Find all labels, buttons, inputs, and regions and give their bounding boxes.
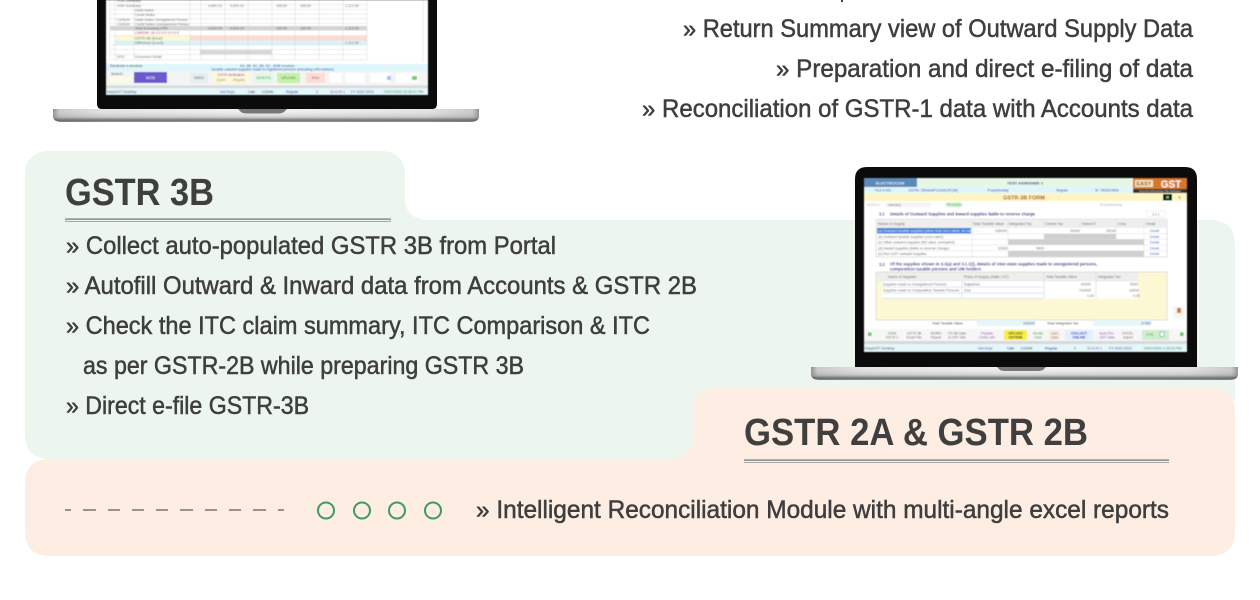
laptop screen: Excel File (907, 336, 921, 340)
table: outward supplies (876, 219, 1167, 257)
laptop screen: FY 2022-2023 (1109, 346, 1132, 350)
table: inter-state supplies (876, 272, 1167, 320)
table: inter-state supplies: 0.00 (1133, 294, 1140, 298)
laptop screen: GREG (194, 76, 204, 80)
laptop screen: Report (931, 336, 941, 340)
table: inter-state supplies: Name of Supplies (888, 275, 917, 279)
table: inter-state supplies: 50000 (1081, 283, 1091, 287)
laptop screen: Credit Notes (135, 13, 155, 17)
laptop screen: Credit Notes Unregistered Person (135, 22, 189, 26)
laptop screen: Hot Keys (220, 90, 235, 94)
table: inter-state supplies: 18000 (1129, 288, 1139, 292)
laptop screen: 4,800.00 (230, 4, 244, 8)
laptop screen: VIEW (888, 332, 897, 336)
feature line: » Autofill Outward & Inward data from Accounts & GSTR 2B (66, 272, 697, 300)
laptop screen: GSTR 3B (907, 332, 922, 336)
laptop screen: Debit Notes (135, 8, 154, 12)
laptop screen: HSN Summary (117, 4, 141, 8)
laptop: GSTR-1 summary screenshot (53, 0, 479, 122)
laptop screen: composition taxable persons and UIN holders (890, 266, 982, 272)
text block: reconciliation feature: » Intelligent Reconciliation Module with multi-angle excel reports (476, 496, 1169, 524)
laptop screen (864, 178, 1187, 352)
laptop screen: DATA Pre (256, 76, 271, 80)
laptop screen: Total Integrated Tax (1047, 322, 1079, 326)
table: inter-state supplies: 9000 (1130, 283, 1138, 287)
feature line: » Reconciliation of GSTR-1 data with Accounts data (642, 95, 1193, 123)
panel: GSTR 3B green background (25, 151, 1235, 459)
laptop screen: GSTIN: 29AAAAP1234A1Z5 [W] (908, 188, 958, 192)
laptop screen: COLLECT (1071, 332, 1088, 336)
laptop screen: LOGIN (1021, 346, 1033, 350)
laptop screen: Document Detail (135, 55, 162, 59)
table: outward supplies: Cess (1118, 222, 1126, 226)
laptop screen: Rectify (1033, 332, 1043, 336)
laptop screen: Regular (233, 78, 246, 82)
laptop screen: B2CB (146, 76, 156, 80)
laptop screen: Proprietorship (1100, 203, 1122, 207)
table: outward supplies: (c) Other outward supplies (Nil rated, exempted) (878, 240, 955, 244)
laptop screen: GSTR Verification (218, 73, 245, 77)
table: outward supplies: 20000 (998, 246, 1008, 250)
laptop screen: MONTH (867, 203, 881, 207)
laptop screen: 156.60 (276, 26, 287, 30)
laptop screen: 4,800.00 (230, 26, 244, 30)
table: outward supplies: Nature of Supply (878, 222, 905, 226)
laptop screen: 3.2 (879, 262, 885, 267)
logo: Easy GST: EASY (1137, 182, 1152, 188)
table: inter-state supplies: 100000 (1079, 288, 1091, 292)
laptop screen: to GST Site (948, 336, 966, 340)
laptop screen: 1 (316, 90, 318, 94)
feature line: as per GSTR-2B while preparing GSTR 3B (83, 352, 524, 380)
table: outward supplies: 3600 (1036, 246, 1044, 250)
laptop screen: Import (1123, 336, 1133, 340)
laptop screen: TEST ASSESSEE 1 (1007, 180, 1044, 186)
laptop screen: A4, 4B, 4C, 6B, 6C - B2B Invoices (240, 64, 295, 68)
laptop screen: 02/07/2022 12:26:47 PM (384, 90, 423, 94)
table: inter-state supplies: 0.00 (1087, 294, 1094, 298)
laptop screen: GSTR-1 (886, 336, 898, 340)
laptop screen: GSTR-3B FORM (1003, 196, 1045, 202)
laptop screen: Regular (286, 90, 299, 94)
panel: GSTR 2A & 2B peach background (25, 388, 1235, 556)
table: outward supplies: 436000 (995, 229, 1007, 233)
laptop screen: Quick (217, 78, 226, 82)
laptop screen: GSTR3B (1009, 336, 1023, 340)
table: outward supplies: Detail (1150, 246, 1159, 250)
logo: Easy GST (1133, 178, 1187, 193)
laptop screen: January (888, 203, 901, 207)
table: outward supplies: Detail (1150, 229, 1159, 233)
laptop screen: 4,800.00 (208, 4, 222, 8)
laptop base (811, 367, 1238, 380)
feature line: » Preparation and direct e-filing of data (776, 55, 1193, 83)
cropped text line at top (841, 0, 843, 2)
table: outward supplies: (d) Inward supplies (liable to reverse charge) (878, 246, 949, 250)
laptop screen: LOGIN (262, 90, 274, 94)
table: inter-state supplies: Supplies made to Composition Taxable Persons (883, 288, 959, 292)
feature line: » Check the ITC claim summary, ITC Comparison & ITC (66, 312, 650, 340)
laptop screen: 1,112.50 (345, 26, 359, 30)
laptop screen: CHALLAN (979, 336, 995, 340)
laptop screen: 156.60 (300, 26, 311, 30)
laptop: GSTR-3B form screenshot (811, 167, 1238, 380)
laptop screen: CARDIN: 30 0.0 0.0 0.0 0.0 (135, 31, 179, 35)
laptop screen: Difference (A-a-b) (135, 41, 164, 45)
laptop screen: 30.8.05.1 (330, 90, 345, 94)
laptop screen: Debit Notes Unregistered Person (135, 18, 188, 22)
table: inter-state supplies: Total Taxable Value (1046, 275, 1077, 279)
laptop screen: CDNUR (117, 18, 130, 22)
laptop screen: 3.1.1 (1152, 212, 1160, 216)
heading: GSTR 3B: GSTR 3B (65, 172, 214, 214)
laptop screen: 27360 (1141, 322, 1151, 326)
laptop body (855, 167, 1197, 367)
laptop screen: Total Excluding HSN (135, 26, 168, 30)
laptop screen: ONLINE (1073, 336, 1086, 340)
laptop screen: Hot Keys (978, 346, 993, 350)
laptop screen: 3.1 (879, 212, 885, 216)
laptop screen: Error (312, 76, 320, 80)
logo: Easy GST: Council of American Tax Software (1139, 189, 1181, 193)
table: inter-state supplies: Supplies made to Unregistered Persons (883, 283, 947, 287)
laptop screen: Electrode e-invoices (110, 64, 143, 68)
laptop screen: EXCEL (1122, 332, 1134, 336)
laptop screen: Prepare (981, 332, 993, 336)
laptop screen: 02/07/2022 1:25:24 PM (1144, 346, 1181, 350)
laptop screen: Regular (1056, 188, 1069, 192)
table: outward supplies: (a) Outward taxable supplies (other than zero rated, nil rated and (878, 229, 981, 233)
laptop screen: User (1051, 332, 1059, 336)
laptop screen: FS-3B Data (948, 332, 966, 336)
laptop screen: 1,112.50 (345, 4, 359, 8)
laptop screen: Taxable outward supplies made to registered persons (including UIN-holders) (211, 68, 334, 72)
laptop screen: Total Taxable Value (932, 322, 963, 326)
feature line: » Direct e-file GSTR-3B (66, 392, 309, 420)
laptop screen: GSTR-3B (Excel) (135, 36, 163, 40)
timeline connector: dashes (65, 509, 284, 511)
laptop screen (106, 0, 428, 95)
heading: GSTR 2A & GSTR 2B: GSTR 2A & GSTR 2B (744, 412, 1088, 454)
laptop screen: EasyGST Desktop (107, 90, 136, 94)
table: outward supplies: Detail (1150, 252, 1159, 256)
laptop screen: Calc (248, 90, 255, 94)
feature line: » Collect auto-populated GSTR 3B from Portal (66, 232, 556, 260)
laptop screen: WORD (931, 332, 942, 336)
laptop screen: Auto-FILL (1100, 332, 1115, 336)
laptop body (97, 0, 437, 109)
laptop screen: PROCEED (946, 203, 963, 207)
table: outward supplies: Total Taxable Value (973, 222, 1004, 226)
table: outward supplies: (b) Outward taxable supplies (zero rated) (878, 235, 943, 239)
table: outward supplies: Central Tax (1045, 222, 1063, 226)
laptop screen: 1 (1074, 346, 1076, 350)
laptop screen: UPLOAD (1008, 332, 1023, 336)
laptop screen: Data (1051, 336, 1058, 340)
laptop screen: CDNUR (117, 22, 130, 26)
table: outward supplies: (e) Non-GST outward supplies (878, 252, 927, 256)
laptop screen: EasyGST Desktop (865, 346, 894, 350)
text block: GSTR 3B features (66, 232, 697, 420)
table: inter-state supplies: Goa (964, 288, 971, 292)
laptop screen: Of the supplies shown in 3.1(a) and 3.1.1(i), details of inter-state supplies made to unregistered persons, (890, 262, 1097, 266)
feature line: » Return Summary view of Outward Supply Data (683, 15, 1193, 43)
logo: Easy GST: GST (1161, 180, 1181, 190)
laptop screen: DOC (117, 55, 125, 59)
table: outward supplies: Integrated Tax (1009, 222, 1032, 226)
table: outward supplies: Detail (1150, 235, 1159, 239)
table: outward supplies: 39240 (1106, 229, 1116, 233)
laptop screen: 4,800.00 (208, 26, 222, 30)
laptop screen: 153000 (1023, 322, 1035, 326)
laptop screen: FY 2022-2023 (351, 90, 374, 94)
laptop screen: x (1178, 195, 1181, 201)
laptop screen: FILE # 001 (875, 188, 891, 192)
laptop screen: UPLOAD (282, 76, 296, 80)
laptop screen: Details of Outward Supplies and inward supplies liable to reverse charge (890, 212, 1036, 216)
table: outward supplies: Detail (1150, 240, 1159, 244)
laptop screen: Proprietorship (987, 188, 1009, 192)
laptop screen: M: 7503014900 (1095, 188, 1119, 192)
laptop screen: 156.60 (276, 4, 287, 8)
text block: GSTR-1 features (642, 15, 1193, 123)
table: inter-state supplies: Integrated Tax (1098, 275, 1121, 279)
table: outward supplies: Detail (1146, 222, 1155, 226)
laptop screen: 30.8.05.1 (1087, 346, 1102, 350)
icon: four green circles (318, 502, 441, 518)
laptop screen: ELECTROCOM (876, 180, 905, 186)
laptop screen: Regular (1045, 346, 1058, 350)
laptop screen: Search : (111, 72, 124, 76)
laptop screen: Data (1034, 336, 1042, 340)
laptop base (53, 109, 479, 122)
laptop screen: 156.60 (300, 4, 311, 8)
table: inter-state supplies: Rajasthan (964, 283, 980, 287)
laptop screen: PTD (1147, 333, 1154, 337)
table: outward supplies: 39240 (1070, 229, 1080, 233)
table: inter-state supplies: Place of Supply (State / UT) (964, 275, 1009, 279)
table: outward supplies: State/UT (1082, 222, 1097, 226)
laptop screen: 1,112.50 (345, 41, 359, 45)
laptop screen: Calc (1007, 346, 1014, 350)
laptop screen: GST Data (1099, 336, 1115, 340)
